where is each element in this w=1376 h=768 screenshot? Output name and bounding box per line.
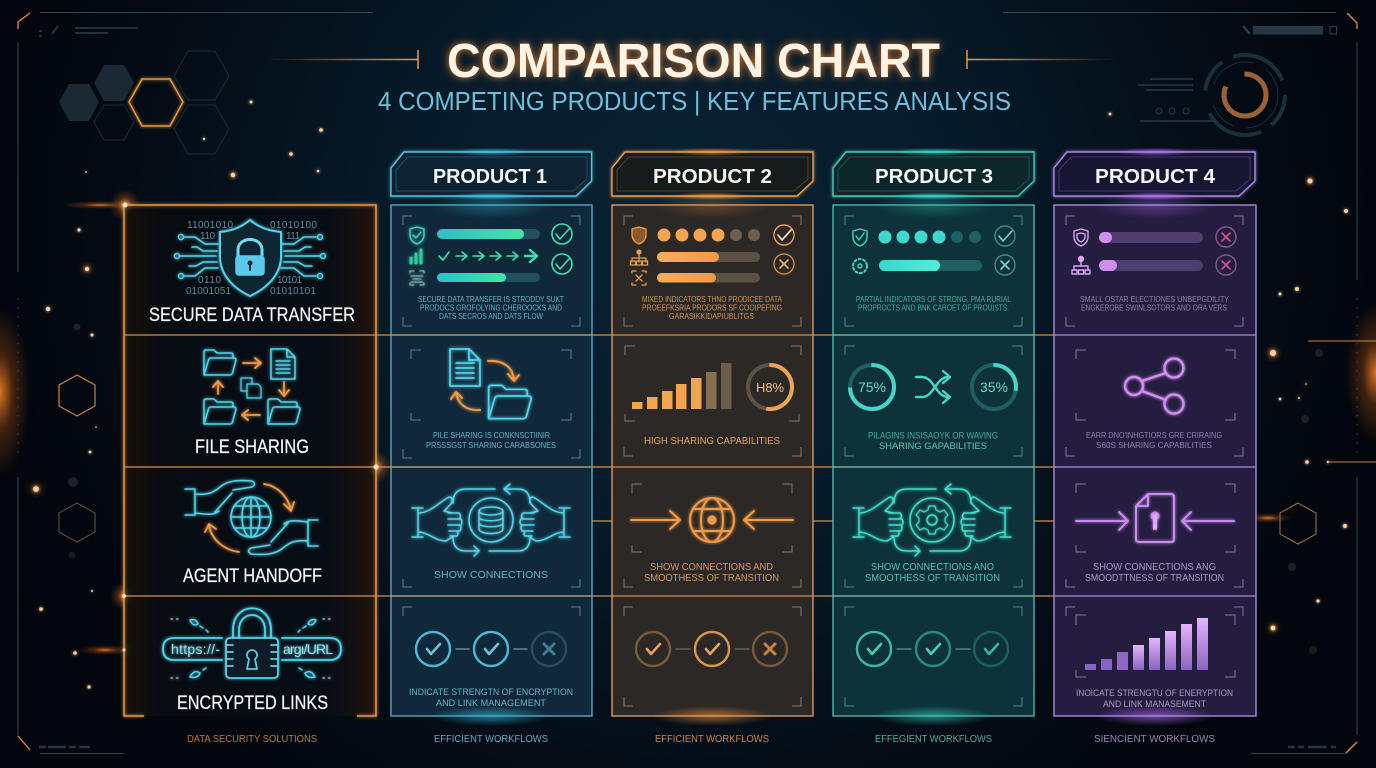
product 1 file sharing cell: PILE SHARING IS CONKNSCTIINIR xyxy=(433,430,550,440)
icon: agent handoff xyxy=(185,481,318,554)
binary digits: 0110 xyxy=(198,275,221,286)
header: product 4 xyxy=(1054,148,1255,200)
header: product 3: PRODUCT 3 xyxy=(875,165,993,188)
column panel: product 1 xyxy=(391,191,592,726)
footer: product 2 caption: EFFICIENT WORKFLOWS xyxy=(655,733,769,745)
flares xyxy=(122,202,378,652)
product 4 signal bars: AND LINK MANASEMENT xyxy=(1103,699,1206,710)
footer: product 1 caption: EFFICIENT WORKFLOWS xyxy=(434,733,548,745)
product 1 secure data cell: DATS SECROS AND DATS FLOW xyxy=(439,312,543,321)
icon: encrypted link padlock: argı/URL xyxy=(283,641,333,657)
corner brackets xyxy=(403,216,580,616)
binary digits: 01001051 xyxy=(186,286,231,297)
icon: file sharing cycle xyxy=(204,349,300,424)
product 3 connections cell: SMOOTHESS OF TRANSITION xyxy=(865,573,1000,584)
binary digits: 01010100 xyxy=(270,220,317,231)
product 4 signal bars: INOICATE STRENGTU OF ENERYPTION xyxy=(1076,688,1233,699)
product 2 bar chart and gauge: H8% xyxy=(756,380,784,395)
product 4 signal bars xyxy=(1076,618,1233,710)
product 4 share icon: S60S SHARING CAPABILITIES xyxy=(1096,440,1212,450)
binary digits: 11001010 xyxy=(187,220,233,231)
product 4 connections cell xyxy=(1076,494,1234,584)
footer: product 3 caption: EFFEGIENT WORKFLOWS xyxy=(875,733,992,745)
row divider lines xyxy=(124,335,1256,596)
row label: file sharing: FILE SHARING xyxy=(195,437,309,458)
product 2 bar chart and gauge: HIGH SHARING CAPABILITIES xyxy=(644,435,780,447)
header: product 2: PRODUCT 2 xyxy=(653,165,772,188)
product 2 secure data cell: MIXED INDICATORS THNO PRODICEE DATA xyxy=(642,295,783,304)
product 2 secure data cell: GARASIKKIDAPIUBLITGS xyxy=(669,312,754,321)
product 3 gauges and shuffle: 35% xyxy=(980,379,1008,395)
binary digits: 10101 xyxy=(277,275,302,286)
icon: encrypted link padlock: https://- xyxy=(171,641,220,657)
product 4 secure data cell: ENGKEROBE SWINLSOTORS AND ORA VERS xyxy=(1081,304,1227,312)
product 4 connections cell: SMOODTTNESS OF TRANSITION xyxy=(1085,573,1224,584)
product 2 secure data cell: PROEEFKSRIA PRODORS SF COOIPEFING xyxy=(642,304,782,312)
product 2 secure data cell xyxy=(630,225,794,321)
product 3 gauges and shuffle: 75% xyxy=(858,379,886,395)
flare lines and side hexagons xyxy=(59,341,1376,544)
product 2 encrypted links status xyxy=(636,632,787,666)
row label: secure data transfer: SECURE DATA TRANSFER xyxy=(149,305,355,326)
title rule left xyxy=(268,50,418,69)
HUD ring gauge xyxy=(1138,55,1285,135)
product 4 secure data cell xyxy=(1072,227,1236,312)
product 1 file sharing cell xyxy=(426,349,556,450)
product 1 connections cell xyxy=(412,484,570,581)
product 4 secure data cell: SMALL OSTAR ELECTIONES UNBEPGDILITY xyxy=(1080,295,1230,304)
product 3 gauges and shuffle: PILAGINS INSISAOYK OR WAVING xyxy=(868,430,998,440)
product 1 secure data cell xyxy=(410,224,572,321)
icon: shield with lock and circuits xyxy=(174,220,326,296)
icon: encrypted link padlock xyxy=(163,608,341,678)
header: product 2 xyxy=(612,148,813,200)
product 1 encrypted links status: INDICATE STRENGTN OF ENCRYPTION xyxy=(409,687,573,698)
product 4 share icon: EARR DNO'INHGTIORS GRE CRIRAING xyxy=(1086,430,1222,440)
hexagon cluster xyxy=(59,51,229,154)
footer: left caption: DATA SECURITY SOLUTIONS xyxy=(187,733,317,745)
product 3 gauges and shuffle: SHARING GAPABILITIES xyxy=(879,441,987,452)
background glows xyxy=(0,168,1376,655)
title rule right xyxy=(967,50,1116,69)
column panel: product 4 xyxy=(1054,191,1256,726)
header: product 3 xyxy=(833,148,1034,200)
product 3 gauges and shuffle xyxy=(850,365,1016,452)
product 3 secure data cell: PARTIAL INDICATORS OF STRONG, PMA RURIAL xyxy=(856,295,1011,304)
product 1 encrypted links status xyxy=(409,632,573,709)
product 2 connections cell: SHOW CONNECTIONS AND xyxy=(650,562,773,573)
product 2 connections cell: SMOOTHESS OF TRANSITION xyxy=(644,573,779,584)
product 1 connections cell: SHOW CONNECTIONS xyxy=(434,569,548,581)
row label: agent handoff: AGENT HANDOFF xyxy=(183,566,322,587)
corner brackets xyxy=(624,216,801,706)
corner brackets xyxy=(845,216,1022,706)
binary digits: 111 xyxy=(286,231,300,242)
product 4 connections cell: SHOW CONNECTIONS ANG xyxy=(1093,562,1216,573)
product 1 file sharing cell: PRSSSGST SHARING CARABSONES xyxy=(426,440,556,450)
product 3 secure data cell: PROPROCTS AND BNK CAROET OF PROUISTS. xyxy=(858,304,1009,312)
corner brackets xyxy=(1066,216,1243,677)
product 1 secure data cell: SECURE DATA TRANSFER IS STRODDY SUKT xyxy=(418,295,564,304)
product 3 connections cell xyxy=(853,484,1011,584)
column panel: product 3 xyxy=(833,191,1034,726)
subtitle: 4 COMPETING PRODUCTS | KEY FEATURES ANALYSIS xyxy=(378,86,1011,116)
binary digits xyxy=(186,220,317,297)
header: product 4: PRODUCT 4 xyxy=(1095,165,1216,188)
binary digits: 110 xyxy=(200,231,215,242)
panel: row labels box xyxy=(124,205,376,716)
particles xyxy=(33,100,1348,689)
binary digits: 01010101 xyxy=(270,286,316,297)
product 1 encrypted links status: AND LINK MANAGEMENT xyxy=(436,698,546,709)
product 1 secure data cell: PRODOCS GROFOLYING CHEROOCKS AND xyxy=(420,304,562,312)
column panel: product 2 xyxy=(612,191,813,726)
header: product 1: PRODUCT 1 xyxy=(433,165,547,188)
product 2 bar chart and gauge xyxy=(632,363,792,447)
header: product 1 xyxy=(391,148,592,200)
product 3 encrypted links status xyxy=(857,632,1008,666)
product 4 share icon xyxy=(1086,358,1222,450)
product 3 connections cell: SHOW CONNECTIONS ANO xyxy=(871,562,994,573)
product 2 connections cell xyxy=(631,498,793,584)
product 3 secure data cell xyxy=(853,226,1015,312)
row label: encrypted links: ENCRYPTED LINKS xyxy=(177,693,328,714)
footer: product 4 caption: SIENCIENT WORKFLOWS xyxy=(1094,733,1215,745)
title: COMPARISON CHART xyxy=(447,35,940,88)
